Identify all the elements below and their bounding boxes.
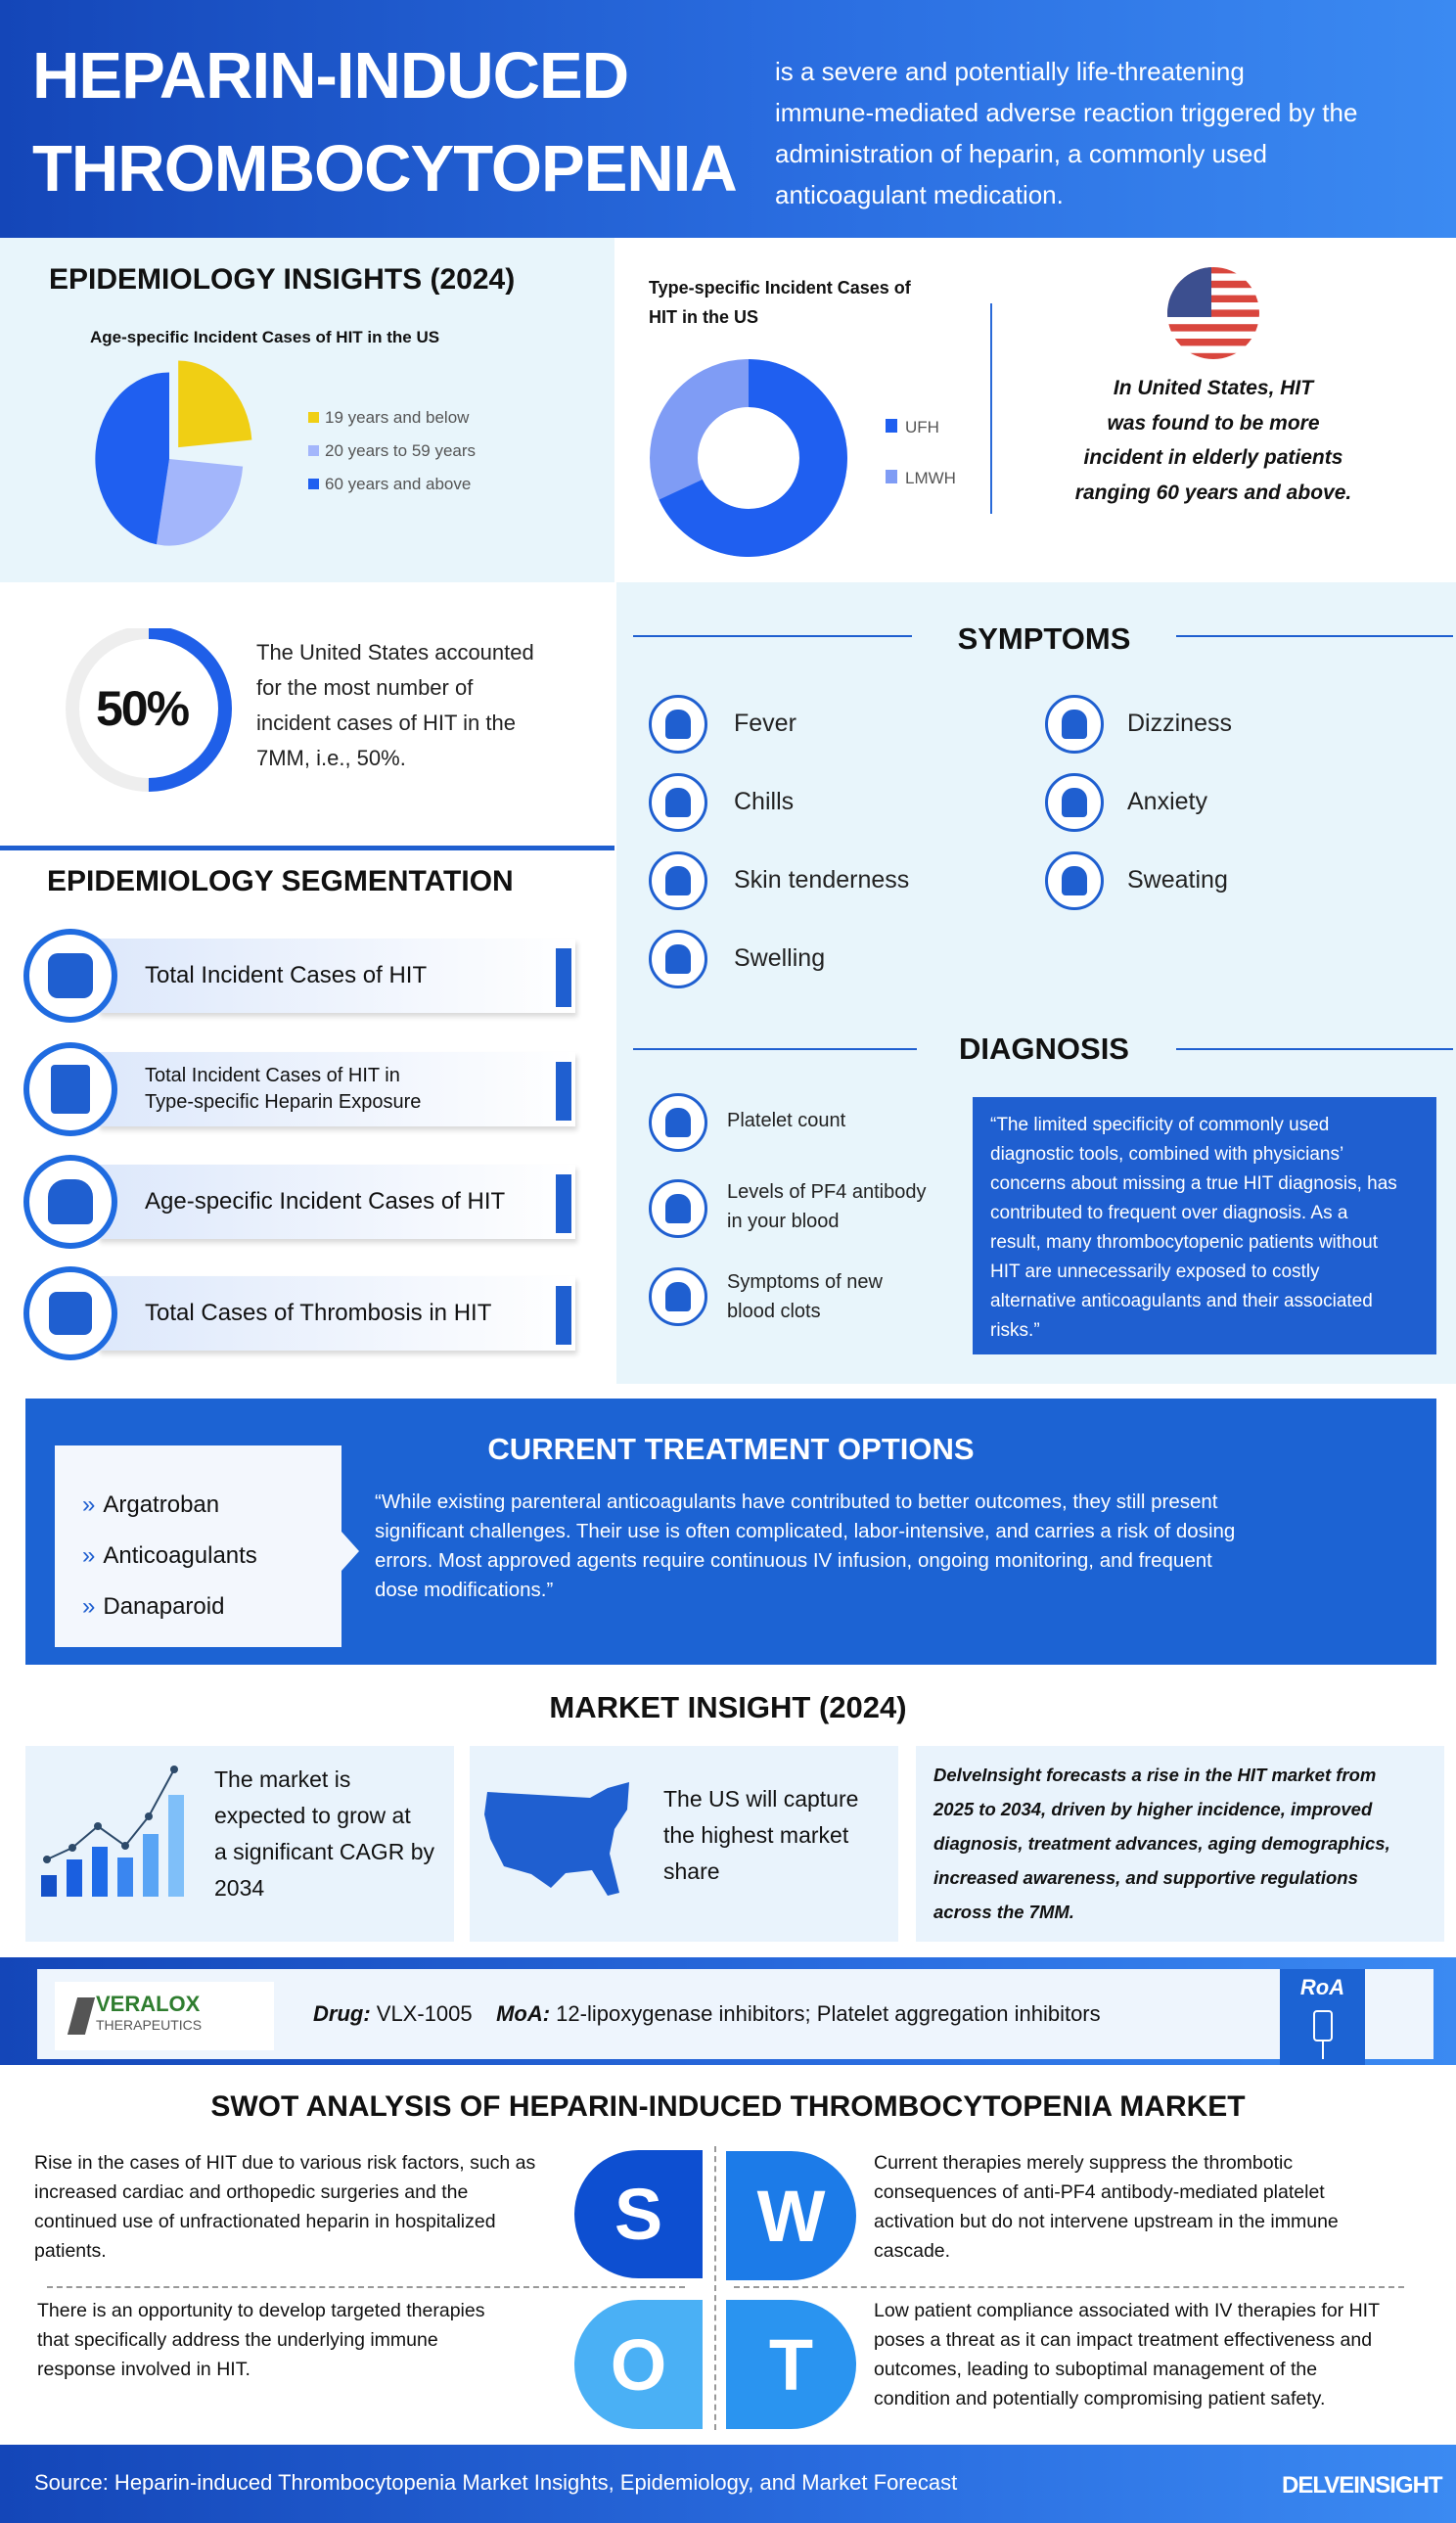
symptom: chills	[649, 773, 794, 832]
legend: 60 years and above	[325, 475, 471, 493]
segment: total incident: Total Incident Cases of HIT	[145, 962, 427, 988]
drug text: Drug: VLX-1005 MoA: 12-lipoxygenase inhibitors; Platelet aggregation inhibitors	[313, 2001, 1101, 2026]
source text: Source: Heparin-induced Thrombocytopenia Market Insights, Epidemiology, and Market Forecast	[34, 2470, 957, 2495]
SWOT: strengths text: patients.	[34, 2240, 107, 2262]
diagnosis: platelet count	[649, 1093, 845, 1152]
diagnosis quote box: HIT are unnecessarily exposed to costly	[990, 1262, 1320, 1282]
treatment list box: » Argatroban	[82, 1491, 219, 1518]
logo: Veralox Therapeutics: THERAPEUTICS	[96, 2017, 202, 2033]
segment: thrombosis: Total Cases of Thrombosis in HIT	[145, 1300, 491, 1326]
SWOT: threats text: condition and potentially compromising patient safety.	[874, 2388, 1325, 2409]
diagnosis quote box: concerns about missing a true HIT diagnosis, has	[990, 1173, 1397, 1194]
SWOT: weaknesses text	[874, 2152, 1339, 2262]
symptom: sweating	[1045, 851, 1228, 910]
treatment list box: » Danaparoid	[82, 1593, 224, 1620]
SWOT: opportunities text: response involved in HIT.	[37, 2359, 250, 2380]
title	[32, 39, 737, 206]
diagnosis quote box: alternative anticoagulants and their associated	[990, 1291, 1373, 1311]
CAGR text: 2034	[214, 1875, 264, 1901]
callout: US elderly: In United States, HIT	[1114, 377, 1313, 399]
CAGR text: The market is	[214, 1766, 350, 1792]
diagnosis quote box	[973, 1097, 1436, 1354]
title: HEPARIN-INDUCED	[32, 39, 628, 113]
diagnosis: platelet count: Platelet count	[727, 1110, 845, 1131]
drug band: Veralox	[0, 1957, 1456, 2065]
card: DelveInsight forecast: DelveInsight forecasts a rise in the HIT market from	[933, 1765, 1376, 1785]
diagnosis quote box: risks.”	[990, 1320, 1040, 1341]
SWOT: threats text: Low patient compliance associated with IV therapies for HIT	[874, 2300, 1380, 2321]
treatment quote: significant challenges. Their use is often complicated, labor-intensive, and carries a risk of dosing	[375, 1520, 1235, 1542]
segment: type-specific: Type-specific Heparin Exposure	[145, 1091, 421, 1113]
SWOT: threats text	[874, 2300, 1380, 2409]
petal O: O	[611, 2323, 666, 2406]
petal T	[726, 2300, 856, 2429]
CAGR text: a significant CAGR by	[214, 1839, 434, 1864]
legend	[308, 408, 476, 493]
SWOT heading: SWOT ANALYSIS OF HEPARIN-INDUCED THROMBOCYTOPENIA MARKET	[210, 2090, 1246, 2123]
donut heading: Type-specific Incident Cases of	[649, 278, 911, 298]
petal S	[574, 2150, 703, 2278]
donut chart	[650, 303, 992, 557]
SWOT: opportunities text	[37, 2300, 484, 2380]
card: DelveInsight forecast	[916, 1746, 1444, 1942]
petal W	[726, 2151, 856, 2280]
SWOT: strengths text	[34, 2152, 535, 2262]
symptom: dizziness: Dizziness	[1127, 710, 1232, 737]
diagnosis quote box: result, many thrombocytopenic patients without	[990, 1232, 1378, 1253]
market insight heading: MARKET INSIGHT (2024)	[549, 1690, 907, 1724]
header banner	[0, 0, 1456, 238]
symptom: anxiety	[1045, 773, 1207, 832]
symptom: skin tenderness	[649, 851, 909, 910]
card: US market share	[470, 1746, 898, 1942]
50% label: 50%	[96, 681, 188, 736]
card: CAGR growth	[25, 1746, 454, 1942]
SWOT: strengths text: increased cardiac and orthopedic surgeries and the	[34, 2181, 468, 2203]
diagnosis heading: DIAGNOSIS	[959, 1032, 1129, 1066]
diagnosis: PF4: in your blood	[727, 1211, 840, 1232]
diagnosis: PF4	[649, 1179, 926, 1238]
stat text: incident cases of HIT in the	[256, 711, 516, 735]
segment: age-specific	[23, 1155, 579, 1249]
logo: DelveInsight: DELVEINSIGHT	[1282, 2472, 1442, 2499]
heading: EPIDEMIOLOGY INSIGHTS (2024)	[49, 263, 515, 296]
petal O	[574, 2300, 703, 2429]
card: DelveInsight forecast: across the 7MM.	[933, 1902, 1074, 1922]
treatment quote: errors. Most approved agents require continuous IV infusion, ongoing monitoring, and frequent	[375, 1549, 1212, 1572]
SWOT: opportunities text: There is an opportunity to develop targeted therapies	[37, 2300, 484, 2321]
symptom: swelling: Swelling	[734, 944, 825, 972]
market share text: The US will capture	[663, 1786, 858, 1812]
title: THROMBOCYTOPENIA	[32, 132, 737, 206]
card: DelveInsight forecast: increased awareness, and supportive regulations	[933, 1867, 1358, 1888]
symptom: sweating: Sweating	[1127, 866, 1228, 894]
market share text: share	[663, 1858, 720, 1884]
donut legend: LMWH	[905, 469, 956, 487]
diagnosis: blood clots: Symptoms of new	[727, 1271, 883, 1293]
logo: Veralox Therapeutics: VERALOX	[96, 1992, 200, 2016]
segment: type-specific	[23, 1042, 579, 1136]
subheading: Age-specific Incident Cases of HIT in the US	[90, 328, 439, 346]
segment: total incident	[23, 929, 579, 1023]
petal S: S	[614, 2174, 662, 2255]
logo: Veralox Therapeutics	[55, 1982, 274, 2050]
pie chart	[95, 360, 252, 546]
callout: US elderly	[1075, 377, 1351, 503]
SWOT: threats text: outcomes, leading to suboptimal management of the	[874, 2359, 1317, 2380]
SWOT: weaknesses text: consequences of anti-PF4 antibody-mediated platelet	[874, 2181, 1325, 2203]
SWOT: strengths text: Rise in the cases of HIT due to various risk factors, such as	[34, 2152, 535, 2174]
petal W: W	[757, 2175, 825, 2257]
RoA box with IV icon: RoA	[1300, 1975, 1344, 1999]
donut heading	[649, 278, 911, 327]
treatment quote: “While existing parenteral anticoagulants have contributed to better outcomes, they still present	[375, 1491, 1217, 1513]
segment: thrombosis	[23, 1266, 579, 1360]
donut legend: UFH	[905, 418, 939, 436]
legend: 20 years to 59 years	[325, 441, 476, 460]
segment: type-specific: Total Incident Cases of HIT in	[145, 1065, 400, 1086]
symptoms heading: SYMPTOMS	[958, 621, 1130, 656]
symptom: skin tenderness: Skin tenderness	[734, 866, 909, 894]
SWOT: threats text: poses a threat as it can impact treatment effectiveness and	[874, 2329, 1372, 2351]
symptom: fever: Fever	[734, 710, 796, 737]
symptom: anxiety: Anxiety	[1127, 788, 1207, 815]
diagnosis quote box: diagnostic tools, combined with physicians’	[990, 1144, 1343, 1165]
stat text: for the most number of	[256, 675, 473, 700]
treatment quote: dose modifications.”	[375, 1579, 553, 1601]
description	[775, 57, 1357, 209]
panel: current treatment options	[25, 1399, 1436, 1665]
SWOT: weaknesses text: Current therapies merely suppress the thrombotic	[874, 2152, 1293, 2174]
symptom: chills: Chills	[734, 788, 794, 815]
panel: type-specific donut	[649, 267, 1351, 557]
ring chart	[66, 628, 232, 792]
callout: US elderly: incident in elderly patients	[1084, 446, 1342, 469]
diagnosis: blood clots: blood clots	[727, 1301, 821, 1322]
footer	[0, 2445, 1456, 2523]
SWOT: opportunities text: that specifically address the underlying immune	[37, 2329, 438, 2351]
icon: US map	[484, 1782, 629, 1896]
card: DelveInsight forecast: diagnosis, treatment advances, aging demographics,	[933, 1833, 1390, 1854]
panel: epidemiology insights	[0, 238, 614, 582]
petal T: T	[769, 2323, 813, 2406]
50% stat block	[66, 628, 534, 792]
description: is a severe and potentially life-threatening	[775, 57, 1245, 86]
symptom: fever	[649, 695, 796, 754]
epidemiology segmentation heading: EPIDEMIOLOGY SEGMENTATION	[47, 865, 514, 897]
RoA box with IV icon	[1280, 1969, 1365, 2065]
treatment heading: CURRENT TREATMENT OPTIONS	[487, 1432, 975, 1466]
card: DelveInsight forecast: 2025 to 2034, driven by higher incidence, improved	[933, 1799, 1372, 1819]
callout: US elderly: was found to be more	[1107, 411, 1319, 435]
SWOT: weaknesses text: activation but do not intervene upstream in the immune	[874, 2211, 1339, 2232]
market share text: the highest market	[663, 1822, 848, 1848]
stat text: The United States accounted	[256, 640, 534, 665]
donut heading: HIT in the US	[649, 307, 758, 327]
symptom: dizziness	[1045, 695, 1232, 754]
stat text	[256, 640, 534, 770]
SWOT graphic	[574, 2150, 856, 2429]
description: immune-mediated adverse reaction triggered by the	[775, 98, 1357, 127]
SWOT: strengths text: continued use of unfractionated heparin in hospitalized	[34, 2211, 496, 2232]
CAGR text	[214, 1766, 434, 1901]
symptom: swelling	[649, 930, 825, 988]
donut legend	[886, 418, 956, 487]
diagnosis quote box: “The limited specificity of commonly used	[990, 1115, 1329, 1135]
diagnosis: PF4: Levels of PF4 antibody	[727, 1181, 926, 1203]
callout: US elderly: ranging 60 years and above.	[1075, 482, 1351, 503]
CAGR text: expected to grow at	[214, 1803, 411, 1828]
treatment list box: » Anticoagulants	[82, 1542, 257, 1569]
treatment quote	[375, 1491, 1235, 1601]
description: anticoagulant medication.	[775, 180, 1064, 209]
segment: age-specific: Age-specific Incident Cases of HIT	[145, 1188, 505, 1215]
SWOT: weaknesses text: cascade.	[874, 2240, 950, 2262]
diagnosis: blood clots	[649, 1267, 883, 1326]
panel: symptoms and diagnosis	[616, 582, 1456, 1384]
market share text	[663, 1786, 858, 1884]
description: administration of heparin, a commonly used	[775, 139, 1267, 168]
diagnosis quote box: contributed to frequent over diagnosis. As a	[990, 1203, 1347, 1223]
stat text: 7MM, i.e., 50%.	[256, 746, 406, 770]
treatment list box	[55, 1445, 341, 1647]
legend: 19 years and below	[325, 408, 469, 427]
icon: bar chart	[41, 1766, 184, 1897]
icon: US flag	[1167, 267, 1259, 359]
